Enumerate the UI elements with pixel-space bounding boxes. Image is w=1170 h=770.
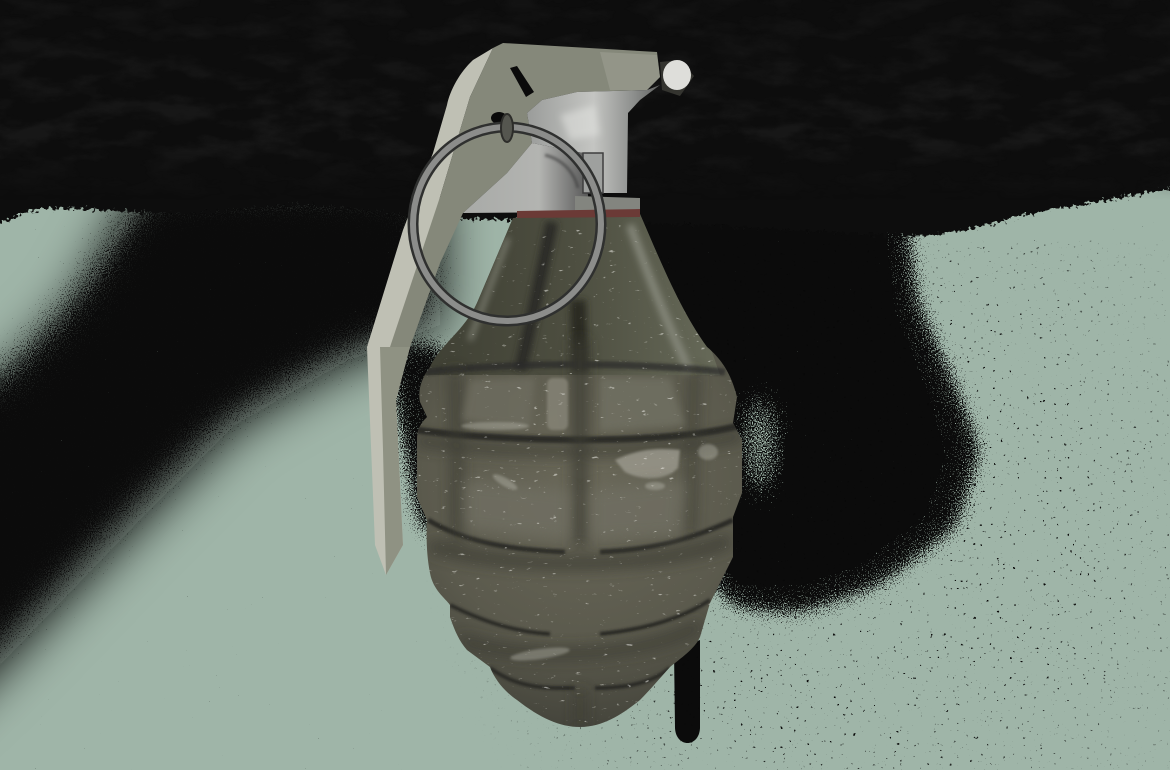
top band texture [6, 88, 1170, 194]
spray: black blob right of grenade [620, 140, 985, 618]
body highlights [462, 378, 685, 540]
horizontal grooves [417, 364, 742, 688]
spray: drip below grenade [674, 640, 700, 743]
spray: drip right of grenade [785, 430, 805, 502]
grenade body [410, 214, 750, 730]
spray: mint stipple right of grenade [736, 387, 784, 503]
lever top sheen [600, 52, 660, 90]
grenade fuze head [463, 85, 660, 213]
grenade pull ring [413, 114, 601, 321]
neck panel shading [425, 214, 720, 375]
lever pin hole [491, 112, 507, 124]
grenade lever [367, 43, 660, 575]
lever pale side strip [367, 48, 493, 575]
neck ribs [470, 222, 690, 372]
soft groove shadows [417, 340, 742, 727]
surface wear [410, 225, 750, 730]
spray: dark patch hugging grenade left [380, 340, 450, 550]
wear patches [461, 422, 718, 663]
spray: speckle scatter [400, 240, 1170, 770]
lever olive face [390, 43, 660, 347]
grenade red seal band [517, 209, 640, 218]
grenade pin head [660, 60, 694, 96]
black torn paper band across the top [0, 0, 1170, 236]
lever lower strip [380, 347, 410, 575]
spray: diagonal black band left [0, 180, 440, 750]
lever slot [510, 66, 534, 97]
grenade [367, 43, 750, 730]
